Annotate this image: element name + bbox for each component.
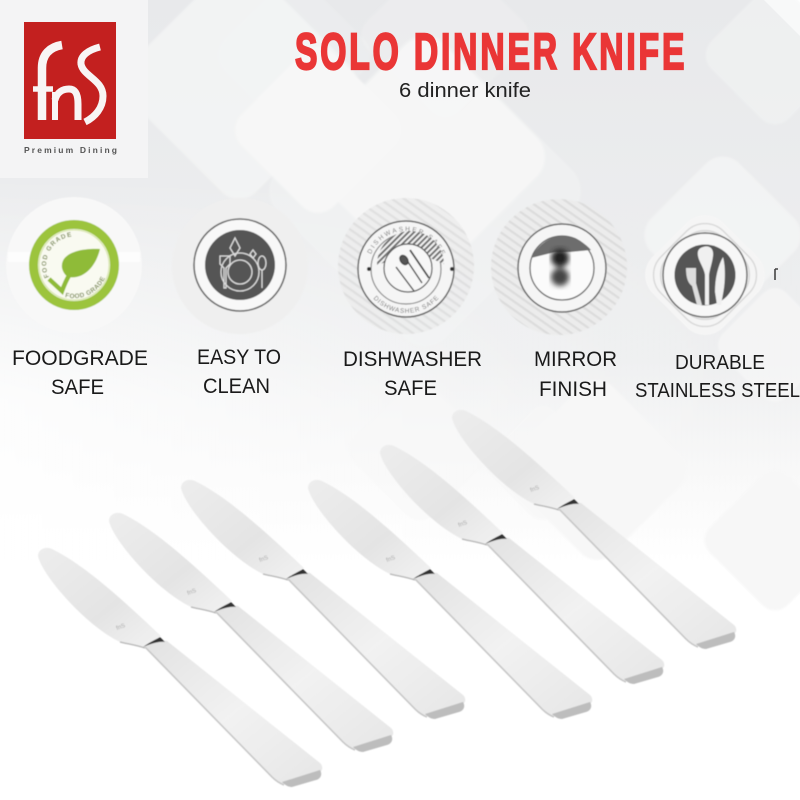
label: durable stainless steel xyxy=(635,352,800,402)
label: foodgrade safe: FOODGRADE xyxy=(12,347,148,370)
logo fnS letters xyxy=(33,45,103,122)
label: dishwasher safe: DISHWASHER xyxy=(343,348,482,371)
icon: easy to clean xyxy=(172,198,308,334)
label: mirror finish: MIRROR xyxy=(534,348,617,371)
icon: dishwasher safe: DISHWASHER SAFE xyxy=(366,226,446,255)
label: dishwasher safe: SAFE xyxy=(384,377,437,400)
knife set xyxy=(38,410,736,787)
icon: durable stainless steel xyxy=(634,204,776,346)
spoon xyxy=(698,246,713,305)
label: foodgrade safe: SAFE xyxy=(51,376,104,399)
logo tagline: Premium Dining xyxy=(24,145,117,155)
icon: food grade xyxy=(8,198,141,310)
title: SOLO DINNER KNIFE xyxy=(295,24,684,81)
leaf xyxy=(62,249,100,277)
icon: food grade: FOOD GRADE xyxy=(41,232,72,279)
label: foodgrade safe xyxy=(12,347,148,399)
label: easy to clean: EASY TO xyxy=(197,346,281,369)
label: dishwasher safe xyxy=(343,348,482,400)
icon: food grade: FOOD GRADE xyxy=(64,276,106,299)
subtitle: 6 dinner knife xyxy=(399,80,531,102)
icon: mirror finish xyxy=(491,199,627,335)
logo red square xyxy=(24,22,116,139)
label: mirror finish xyxy=(534,348,617,401)
label: mirror finish: FINISH xyxy=(539,378,607,401)
logo xyxy=(0,0,148,178)
icon: dishwasher safe xyxy=(338,198,474,334)
label: durable stainless steel: DURABLE xyxy=(675,352,765,374)
label: easy to clean: CLEAN xyxy=(203,375,270,398)
label: easy to clean xyxy=(197,346,281,398)
background xyxy=(0,0,800,480)
icon: dishwasher safe: DISHWASHER SAFE xyxy=(373,295,439,314)
knife xyxy=(715,257,725,305)
stray mark xyxy=(775,269,778,280)
checkmark xyxy=(49,258,82,291)
fork xyxy=(686,268,702,305)
